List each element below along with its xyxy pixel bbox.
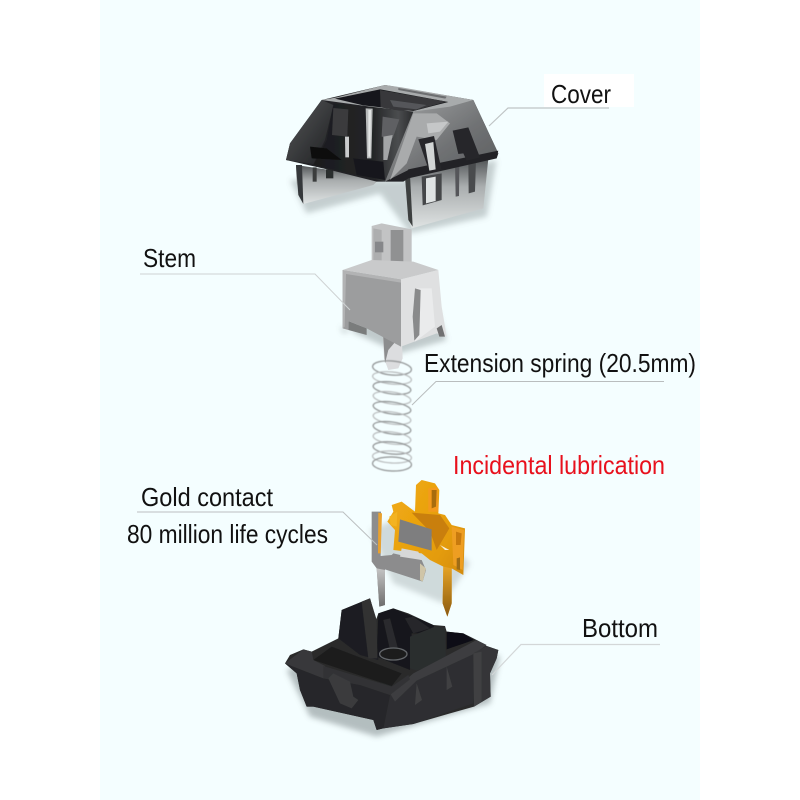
silver contact plate (372, 512, 426, 607)
cover right face (385, 100, 498, 182)
stem post (372, 223, 412, 272)
label: stem: Stem (143, 243, 196, 273)
housing front-left face (285, 663, 390, 730)
housing post (410, 627, 446, 671)
cover front face (313, 103, 413, 182)
label: cover: Cover (551, 79, 611, 109)
housing rear right slot (447, 632, 474, 649)
cover top rim (322, 85, 473, 112)
contact pad (398, 519, 432, 551)
component: bottom housing (285, 598, 500, 737)
leader line: gold contact (137, 512, 377, 545)
housing left rim (285, 649, 325, 678)
housing right tab (473, 646, 498, 707)
housing centre ring (380, 648, 407, 660)
label: life cycles: 80 million life cycles (127, 519, 328, 549)
leader line: bottom (492, 644, 660, 675)
label: bottom: Bottom (582, 613, 658, 643)
stem body notch (348, 321, 367, 335)
housing right face (383, 643, 477, 728)
housing right top edge (390, 640, 487, 702)
stem body right face (401, 270, 447, 347)
left skirt (296, 165, 378, 204)
leader line: spring (412, 382, 664, 405)
stem shaft (383, 330, 403, 370)
stem body top face (343, 260, 438, 279)
label: gold contact: Gold contact (141, 482, 274, 512)
leader line: stem (140, 274, 350, 310)
cover front left wedge (286, 100, 333, 164)
housing ribs (447, 667, 452, 690)
housing tall inner wall (338, 598, 378, 660)
housing rear interior (377, 608, 437, 670)
component: spring (372, 359, 412, 472)
stem side tab (413, 288, 435, 342)
label: extension spring: Extension spring (20.5mm) (424, 348, 696, 378)
gold leaf (387, 480, 465, 617)
housing front-left well (313, 647, 402, 686)
label: incidental lubrication: Incidental lubrication (453, 450, 665, 480)
housing silhouette (285, 598, 498, 730)
cover inner highlights (310, 108, 399, 180)
leader line: cover (489, 108, 609, 126)
stem body left face (343, 270, 401, 347)
component: gold contact (370, 480, 470, 617)
housing clip (328, 673, 358, 708)
housing front rim (323, 666, 410, 695)
cover main body (286, 85, 498, 182)
component: stem (340, 223, 447, 370)
component: cover (286, 85, 498, 233)
cover slots (418, 136, 442, 172)
right skirt with slots (405, 158, 488, 228)
